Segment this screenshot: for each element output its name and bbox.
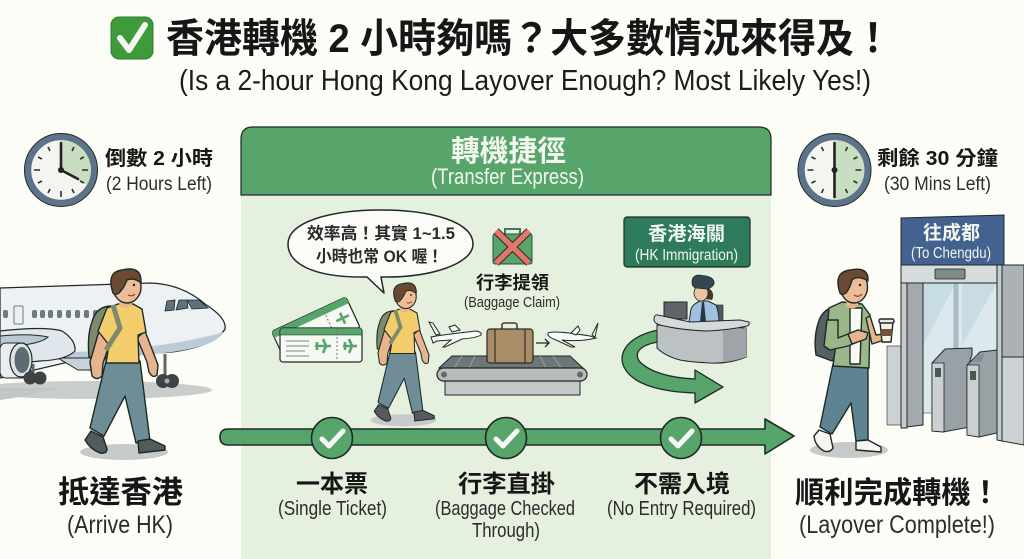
label: no entry required — [607, 471, 756, 520]
turnstile left — [932, 348, 972, 432]
clock label: 2 hours left — [105, 147, 213, 195]
icon: plane departing — [548, 323, 598, 347]
icon: no baggage claim — [493, 229, 532, 264]
clock label: 30 mins left: 剩餘 30 分鐘 — [877, 146, 998, 170]
icon: suitcase — [487, 323, 533, 363]
destination sign: (To Chengdu) — [911, 245, 991, 262]
icon: baggage conveyor — [437, 323, 587, 395]
traveller completing layover — [810, 269, 894, 458]
timeline arrow — [220, 418, 794, 458]
traveller walking in panel — [370, 283, 436, 426]
title: 香港轉機 2 小時夠嗎？大多數情況來得及！ — [166, 17, 892, 61]
panel header — [241, 127, 771, 195]
subtitle: (Is a 2-hour Hong Kong Layover Enough? Most Likely Yes!) — [179, 65, 871, 97]
sign: HK immigration: 香港海關 — [648, 223, 725, 245]
sign: HK immigration: (HK Immigration) — [635, 247, 738, 264]
speech bubble: 效率高！其實 1~1.5 — [307, 223, 455, 243]
destination sign: 往成都 — [923, 221, 980, 244]
traveller arriving — [80, 269, 168, 460]
label: baggage checked through: Through) — [472, 520, 540, 542]
curved arrow around immigration — [622, 330, 723, 403]
panel: transfer express — [241, 127, 771, 559]
turnstile right — [967, 350, 997, 437]
icon: plane to baggage — [429, 322, 481, 347]
label: layover complete: 順利完成轉機！ — [795, 477, 1000, 510]
clock: 30 mins left — [798, 134, 871, 206]
panel subheading: (Transfer Express) — [431, 164, 584, 189]
label: no entry required: (No Entry Required) — [607, 498, 756, 520]
label: baggage claim — [464, 272, 560, 311]
destination sign — [901, 215, 1004, 265]
speech bubble: 小時也常 OK 喔！ — [316, 247, 443, 266]
clock label: 2 hours left: (2 Hours Left) — [106, 174, 212, 195]
clock label: 30 mins left — [877, 146, 998, 195]
clock label: 2 hours left: 倒數 2 小時 — [105, 147, 213, 170]
coffee cup — [879, 319, 894, 342]
label: baggage checked through: 行李直掛 — [458, 471, 555, 498]
panel heading: 轉機捷徑 — [451, 135, 566, 168]
label: baggage checked through: (Baggage Checked — [435, 498, 575, 520]
clock label: 30 mins left: (30 Mins Left) — [884, 174, 991, 195]
label: arrive HK: 抵達香港 — [58, 475, 183, 510]
label: baggage claim: (Baggage Claim) — [464, 294, 560, 311]
sign: HK immigration — [624, 217, 750, 267]
clock: 2 hours left — [24, 134, 98, 206]
checkpoint: single ticket — [312, 418, 352, 458]
label: arrive HK — [58, 475, 183, 539]
label: layover complete — [795, 477, 1000, 539]
immigration officer at desk — [654, 275, 749, 363]
title icon: green check box — [111, 17, 153, 59]
label: single ticket: 一本票 — [296, 471, 368, 498]
gate glass — [923, 283, 997, 413]
arrow to plane — [536, 339, 549, 347]
label: no entry required: 不需入境 — [634, 471, 730, 498]
speech bubble — [288, 210, 473, 293]
icon: tickets — [272, 297, 362, 362]
checkpoint: baggage through — [486, 418, 526, 458]
label: single ticket — [278, 471, 387, 520]
security gate — [887, 215, 1024, 445]
checkpoint: no entry — [660, 418, 702, 458]
airplane — [0, 283, 225, 400]
label: single ticket: (Single Ticket) — [278, 498, 387, 520]
label: arrive HK: (Arrive HK) — [67, 511, 173, 539]
label: baggage checked through — [435, 471, 575, 542]
label: baggage claim: 行李提領 — [476, 272, 549, 293]
label: layover complete: (Layover Complete!) — [799, 511, 995, 539]
